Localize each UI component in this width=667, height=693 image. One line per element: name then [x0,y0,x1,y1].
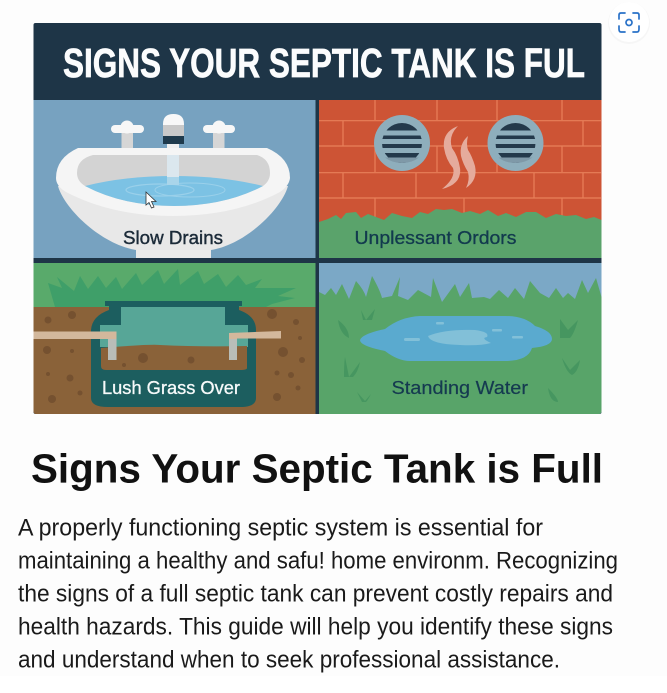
label: lush grass over: Lush Grass Over [102,377,240,398]
label: slow drains: Slow Drains [123,227,223,248]
icon: right vent [488,115,544,171]
grass tuft [48,269,296,307]
label: standing water: Standing Water [392,377,528,398]
intro paragraph [18,514,618,674]
icon: sink basin [56,148,290,258]
icon: left vent [374,115,430,171]
icon: faucet spout [163,114,184,155]
puddle highlights [404,322,523,345]
grass field [319,276,602,414]
icon: septic tank [34,301,281,407]
inlet and outlet pipes [34,332,116,360]
grass clumps [338,309,580,402]
icon: odor wisps [442,126,476,189]
icon: visual search button [608,2,650,44]
intro paragraph: maintaining a healthy and safu! home environm. Recognizing [18,548,618,574]
tank liquid [100,307,248,347]
intro paragraph: the signs of a full septic tank can prevent costly repairs and [18,580,613,608]
tank sludge [101,345,247,370]
panel: lush grass over tank [34,263,316,414]
puddle [360,316,552,361]
water in basin [85,176,263,206]
icon: left tap handle [111,120,144,149]
soil speckles [43,309,305,403]
icon: mouse cursor [146,192,156,208]
illustration card [34,23,602,414]
intro paragraph: A properly functioning septic system is essential for [18,514,543,542]
panel: slow drains [34,100,316,258]
main heading: Signs Your Septic Tank is Full [31,446,603,492]
intro paragraph: health hazards. This guide will help you identify these signs [18,614,613,640]
panel: standing water [319,263,602,414]
panel: unpleasant odors [319,100,602,258]
grass strip [319,209,602,258]
label: unpleasant odors: Unplessant Ordors [354,227,516,248]
intro paragraph: and understand when to seek professional assistance. [18,646,560,674]
icon: right tap handle [203,120,235,149]
